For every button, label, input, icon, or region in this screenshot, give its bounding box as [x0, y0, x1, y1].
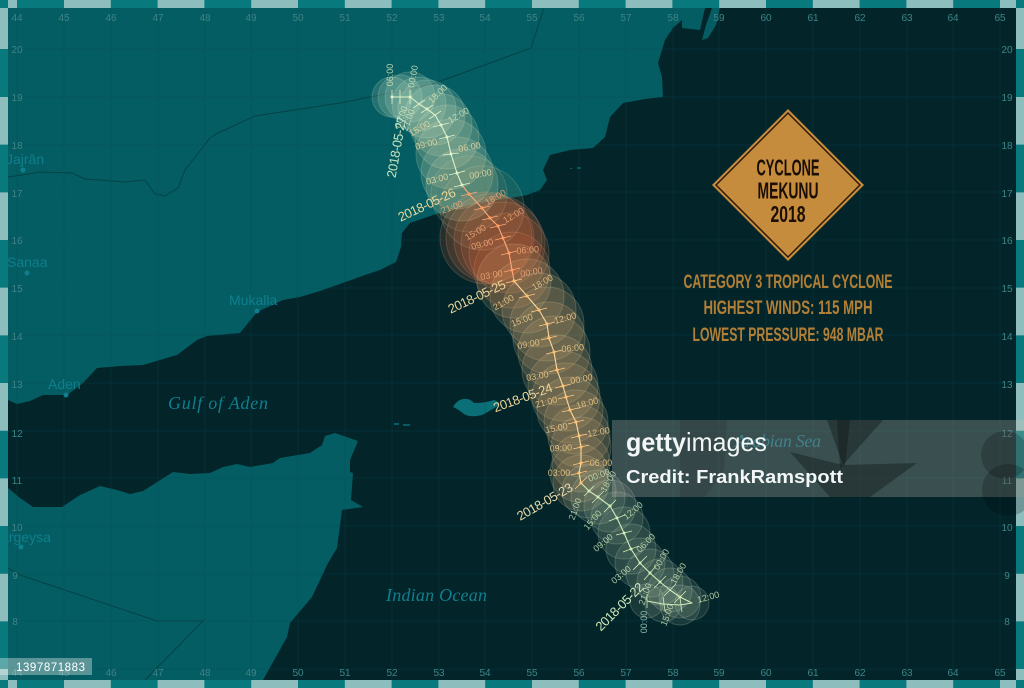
longitude labels top: 60: [760, 13, 772, 24]
watermark dark shapes: [680, 420, 1024, 516]
longitude labels bottom: 46: [105, 668, 117, 679]
warning sign: cyclone name: [712, 109, 864, 261]
longitude labels top: 59: [713, 13, 725, 24]
latitude labels right: 16: [1001, 236, 1013, 247]
time labels south: 21:00: [567, 497, 584, 521]
sea label: Arabian Sea: Arabian Sea: [734, 431, 821, 451]
latitude labels right: 11: [1002, 476, 1013, 487]
sign text: MEKUNU: [758, 178, 818, 204]
longitude labels top: 56: [573, 13, 585, 24]
latitude labels right: 12: [1001, 429, 1013, 440]
small islands: [394, 167, 581, 426]
longitude labels bottom: 47: [152, 668, 164, 679]
circles: central tan section: [477, 244, 611, 511]
latitude labels left: 15: [11, 284, 23, 295]
island: Socotra: [453, 399, 499, 416]
latitude labels right: 14: [1001, 332, 1013, 343]
time labels central section: 21:00: [534, 394, 558, 410]
time labels south: 09:00: [591, 532, 615, 554]
sign text: 2018: [770, 201, 806, 227]
time labels orange section: 21:00: [440, 199, 464, 216]
date labels along track: [384, 115, 647, 634]
longitude labels bottom: 64: [947, 668, 959, 679]
time labels north: 00:00: [406, 65, 420, 88]
time labels south: 21:00: [637, 582, 654, 606]
time labels central section: 21:00: [491, 292, 516, 312]
time labels orange section: 12:00: [501, 205, 526, 225]
longitude labels top: 47: [152, 13, 164, 24]
longitude labels top: 48: [199, 13, 211, 24]
time labels central section: 00:00: [570, 372, 593, 386]
longitude labels bottom: 61: [807, 668, 819, 679]
longitude labels bottom: 54: [479, 668, 491, 679]
time labels north: 00:00: [469, 167, 492, 181]
time labels orange section: 15:00: [463, 222, 488, 242]
latitude labels left: 20: [11, 45, 23, 56]
time labels south: 00:00: [587, 467, 611, 484]
latitude labels right: 18: [1001, 141, 1013, 152]
date labels along track: 2018-05-25: [446, 277, 508, 316]
longitude labels bottom: 51: [339, 668, 351, 679]
landmass: Musandam sliver: [702, 8, 720, 40]
latitude labels left: 10: [11, 523, 23, 534]
landmass: Arabian Peninsula: [8, 8, 705, 404]
longitude labels top: 63: [901, 13, 913, 24]
time labels north: 12:00: [446, 105, 471, 125]
time labels south: 18:00: [668, 561, 688, 586]
time labels south: 12:00: [696, 589, 720, 605]
cyclone statistics text: CATEGORY 3 TROPICAL CYCLONE: [684, 272, 892, 293]
longitude labels top: 49: [245, 13, 257, 24]
sea label: Indian Ocean: Indian Ocean: [385, 585, 487, 605]
circles: intense orange section: [440, 192, 550, 308]
time labels central section: 15:00: [545, 421, 568, 435]
time labels central section: 03:00: [526, 369, 549, 383]
longitude labels bottom: 49: [245, 668, 257, 679]
circles: southern pale green section: [562, 464, 709, 625]
latitude labels right: [1001, 45, 1013, 628]
longitude labels bottom: 62: [854, 668, 866, 679]
date labels along track: 2018-05-24: [491, 380, 555, 415]
longitude labels bottom: 48: [199, 668, 211, 679]
latitude labels left: 9: [12, 571, 18, 582]
watermark logo text: gettyimages: [626, 427, 767, 457]
time labels north: 00:00: [393, 105, 410, 129]
time labels central section: 15:00: [510, 312, 534, 329]
sign text: CYCLONE: [756, 154, 820, 180]
city: Mukalla: Mukalla: [229, 292, 277, 308]
city: Sanaa: Sanaa: [7, 254, 48, 270]
longitude labels top: 52: [386, 13, 398, 24]
date labels along track: 2018-05-26: [396, 185, 458, 224]
landmass: Horn of Africa: [8, 433, 363, 680]
time labels south: 06:00: [634, 531, 657, 554]
time labels central section: 12:00: [587, 425, 610, 439]
time labels orange section: 06:00: [516, 244, 539, 256]
longitude labels bottom: 60: [760, 668, 772, 679]
circles: transition section: [431, 156, 524, 250]
longitude labels bottom: 63: [901, 668, 913, 679]
longitude labels top: 44: [11, 13, 23, 24]
latitude labels left: [11, 45, 23, 628]
circles: northern pale green section: [372, 72, 465, 145]
longitude labels bottom: 58: [667, 668, 679, 679]
latitude labels right: 10: [1001, 523, 1013, 534]
time labels central section: 12:00: [553, 310, 577, 326]
longitude labels bottom: 50: [292, 668, 304, 679]
time labels north: [385, 64, 492, 187]
watermark credit text: Credit: FrankRamspott: [626, 467, 843, 487]
time labels central section: 18:00: [575, 395, 599, 411]
time labels north: 09:00: [414, 136, 438, 152]
longitude labels bottom: 52: [386, 668, 398, 679]
time labels north: 06:00: [458, 140, 481, 154]
longitude labels bottom: [11, 668, 1006, 679]
longitude labels top: 62: [854, 13, 866, 24]
time labels central section: 18:00: [530, 272, 555, 292]
latitude labels right: 9: [1004, 571, 1010, 582]
date labels along track: 2018-05-27: [384, 115, 409, 179]
latitude labels left: 11: [12, 476, 23, 487]
time labels north: 18:00: [426, 82, 449, 105]
city: Aden: Aden: [48, 376, 81, 392]
circles: northern cream section: [410, 94, 498, 221]
cyclone statistics text: [684, 272, 892, 346]
image id tag: [0, 658, 92, 675]
latitude labels left: 14: [11, 332, 23, 343]
latitude labels left: 18: [11, 141, 23, 152]
latitude labels right: 13: [1001, 380, 1013, 391]
latitude labels right: 8: [1004, 617, 1010, 628]
track time ticks: [392, 90, 686, 612]
latitude labels left: 19: [11, 93, 23, 104]
time labels north: 03:00: [425, 171, 449, 187]
latitude labels right: 20: [1001, 45, 1013, 56]
cyclone wind-radius circles: [372, 72, 709, 625]
longitude labels bottom: 53: [433, 668, 445, 679]
longitude labels bottom: 57: [620, 668, 632, 679]
time labels south: 12:00: [621, 500, 645, 522]
longitude labels bottom: 55: [526, 668, 538, 679]
latitude labels left: 12: [11, 429, 23, 440]
latitude labels left: 17: [11, 189, 23, 200]
city: Jajran: Jajrān: [6, 151, 44, 167]
latitude labels left: 16: [11, 236, 23, 247]
longitude labels top: 57: [620, 13, 632, 24]
longitude labels bottom: 56: [573, 668, 585, 679]
date labels along track: 2018-05-23: [514, 480, 575, 524]
time labels central section: 09:00: [517, 337, 540, 351]
longitude labels top: 61: [807, 13, 819, 24]
time labels orange section: 00:00: [520, 265, 543, 279]
latitude labels right: 17: [1001, 189, 1013, 200]
longitude labels top: 46: [105, 13, 117, 24]
latitude labels left: 13: [11, 380, 23, 391]
longitude labels top: 45: [58, 13, 70, 24]
time labels central section: 03:00: [548, 468, 570, 478]
longitude labels bottom: 65: [994, 668, 1006, 679]
longitude labels bottom: 45: [58, 668, 70, 679]
cyclone track line: [392, 97, 692, 605]
sea label: Gulf of Aden: Gulf of Aden: [168, 393, 268, 413]
longitude labels top: 65: [994, 13, 1006, 24]
time labels north: 21:00: [400, 108, 417, 132]
longitude labels top: [11, 13, 1006, 24]
watermark panel: [612, 420, 1024, 516]
sign text: [756, 154, 820, 227]
cyclone statistics text: HIGHEST WINDS: 115 MPH: [704, 298, 872, 319]
longitude labels bottom: 59: [713, 668, 725, 679]
cyclone statistics text: LOWEST PRESSURE: 948 MBAR: [692, 325, 884, 346]
time labels orange section: 09:00: [470, 236, 494, 252]
place labels: [0, 151, 277, 550]
latitude labels left: 8: [12, 617, 18, 628]
time labels central section: 06:00: [590, 458, 612, 468]
country borders: [8, 8, 544, 680]
time labels orange section: [440, 187, 543, 282]
time labels central section: 09:00: [549, 442, 572, 454]
time labels south: 03:00: [609, 564, 633, 586]
latitude labels right: 15: [1001, 284, 1013, 295]
time labels south: 15:00: [659, 603, 676, 627]
longitude labels top: 55: [526, 13, 538, 24]
time labels south: 18:00: [598, 469, 618, 494]
date labels along track: 2018-05-22: [592, 579, 647, 634]
time labels orange section: 03:00: [480, 268, 503, 282]
longitude labels top: 64: [947, 13, 959, 24]
time labels south: 00:00: [651, 547, 671, 572]
longitude labels top: 54: [479, 13, 491, 24]
longitude labels top: 53: [433, 13, 445, 24]
longitude labels top: 50: [292, 13, 304, 24]
longitude labels bottom: 44: [11, 668, 23, 679]
time labels orange section: 18:00: [483, 187, 508, 207]
longitude labels top: 58: [667, 13, 679, 24]
latitude labels right: 19: [1001, 93, 1013, 104]
track markers: [390, 96, 682, 598]
time labels south: 15:00: [582, 508, 604, 532]
time labels central section: 06:00: [561, 342, 584, 354]
time labels north: 15:00: [407, 118, 432, 138]
time labels north: 06:00: [385, 64, 395, 86]
time labels central section: [491, 272, 612, 478]
longitude labels top: 51: [339, 13, 351, 24]
time labels south: 00:00: [639, 611, 649, 633]
image id tag: 1397871883: [16, 662, 85, 674]
time labels south: [567, 467, 720, 633]
